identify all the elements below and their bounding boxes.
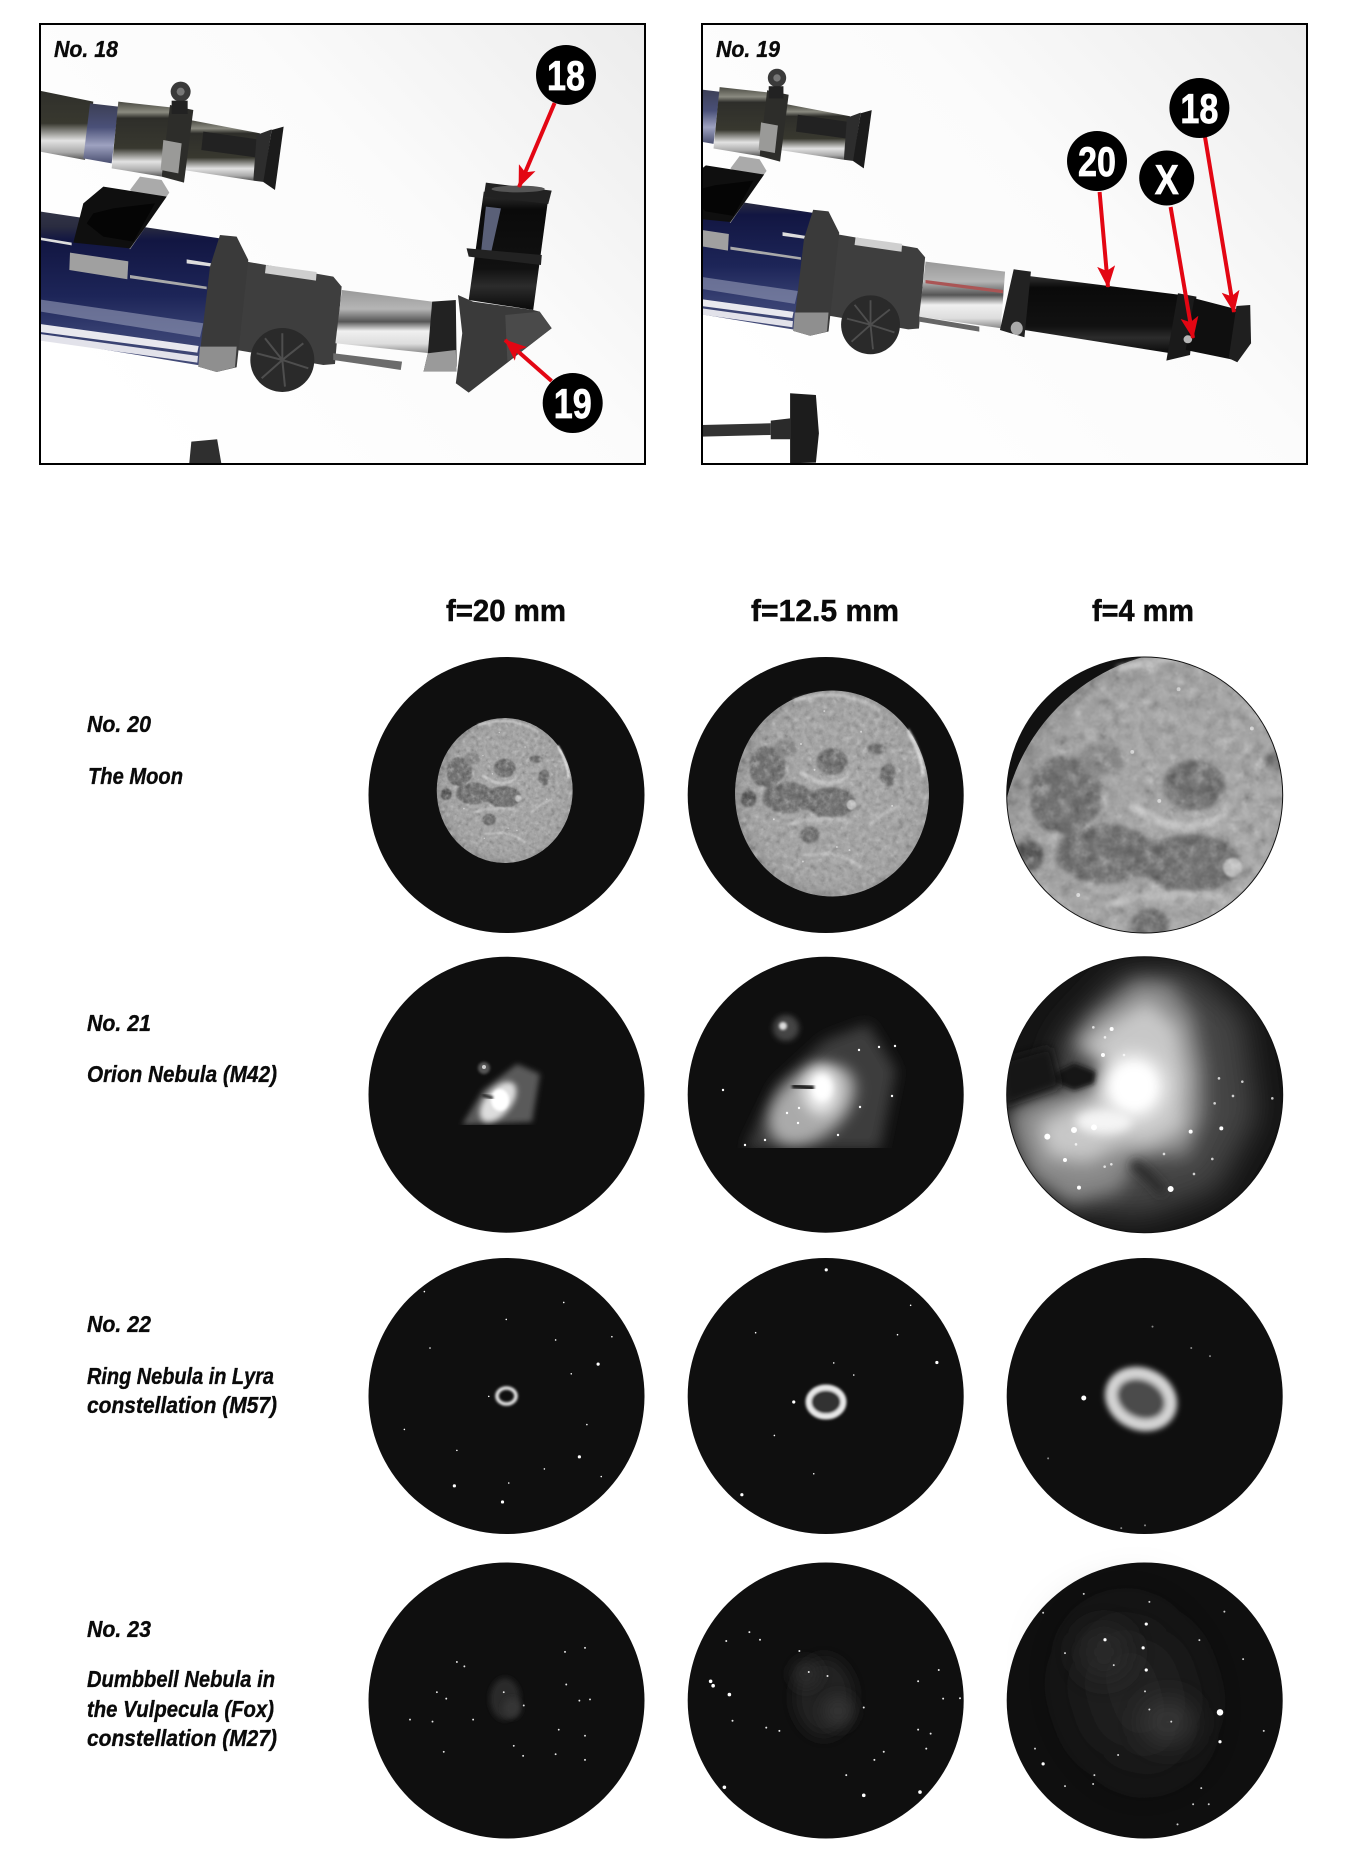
view: Orion Nebula at f=12.5 mm [688,957,964,1233]
view: Orion Nebula at f=4 mm [1004,957,1283,1233]
badge: 20 [1067,131,1127,191]
view: Moon at f=20 mm [368,657,644,933]
row label: No. 22 Ring Nebula: No. 22 [87,1311,151,1337]
row label: No. 21 Orion Nebula: No. 21 [87,1010,151,1036]
row label: No. 22 Ring Nebula [87,1311,277,1418]
stars [711,1632,960,1795]
view: Ring Nebula at f=12.5 mm [688,1258,964,1534]
view: Dumbbell Nebula at f=4 mm [1007,1562,1283,1838]
badge: 18: 18 [547,52,585,99]
badge: 19: 19 [554,380,592,427]
badge: X: X [1155,156,1179,203]
arrow to eyepiece [1205,137,1234,312]
view: Dumbbell Nebula at f=20 mm [368,1562,644,1838]
panel frame [702,24,1307,464]
row label: No. 23 Dumbbell Nebula: the Vulpecula (Fox) [87,1696,274,1722]
telescope photo with diagonal [41,82,552,463]
row label: No. 20 The Moon: The Moon [88,763,183,789]
row label: No. 21 Orion Nebula [87,1010,277,1087]
badge: 20: 20 [1078,138,1116,185]
telescope photo with straight eyepiece [525,52,1251,463]
view: Ring Nebula at f=20 mm [368,1258,644,1534]
row label: No. 23 Dumbbell Nebula: constellation (M27) [87,1725,277,1751]
stars [1048,1327,1210,1528]
arrow to eyepiece [519,103,555,187]
row label: No. 20 The Moon: No. 20 [87,711,151,737]
row label: No. 23 Dumbbell Nebula: Dumbbell Nebula in [87,1666,275,1692]
row label: No. 23 Dumbbell Nebula [87,1616,277,1751]
badge: X [1139,150,1194,206]
stars [404,1292,612,1502]
column heading: f=12.5 mm: f=12.5 mm [751,593,899,628]
view: Moon at f=12.5 mm [688,657,964,933]
view: Ring Nebula at f=4 mm [1007,1258,1283,1534]
row label: No. 22 Ring Nebula: constellation (M57) [87,1392,277,1418]
arrow to diagonal [505,340,552,381]
panel label: No. 18: No. 18 [54,36,118,62]
badge: 18: 18 [1180,85,1218,132]
row label: No. 23 Dumbbell Nebula: No. 23 [87,1616,151,1642]
row label: No. 20 The Moon [87,711,183,789]
row label: No. 21 Orion Nebula: Orion Nebula (M42) [87,1061,277,1087]
arrow to clamp screw [1171,207,1193,338]
panel frame [40,24,645,464]
view: Moon at f=4 mm [1006,656,1284,934]
stars [1035,1594,1264,1824]
view: Dumbbell Nebula at f=12.5 mm [688,1562,964,1838]
badge: 18 [1169,78,1229,138]
view: Orion Nebula at f=20 mm [368,957,644,1233]
column heading: f=4 mm: f=4 mm [1092,593,1194,628]
stars [742,1270,937,1495]
panel label: No. 19: No. 19 [716,36,780,62]
arrow to barlow tube [1100,192,1108,287]
row label: No. 22 Ring Nebula: Ring Nebula in Lyra [87,1363,274,1389]
photo panel: No. 18 star diagonal and eyepiece [0,24,645,464]
photo panel: No. 19 barlow and eyepiece [701,23,1308,465]
column heading: f=20 mm: f=20 mm [446,593,566,628]
badge: 18 [536,45,596,105]
stars [410,1648,590,1760]
badge: 19 [543,373,603,433]
